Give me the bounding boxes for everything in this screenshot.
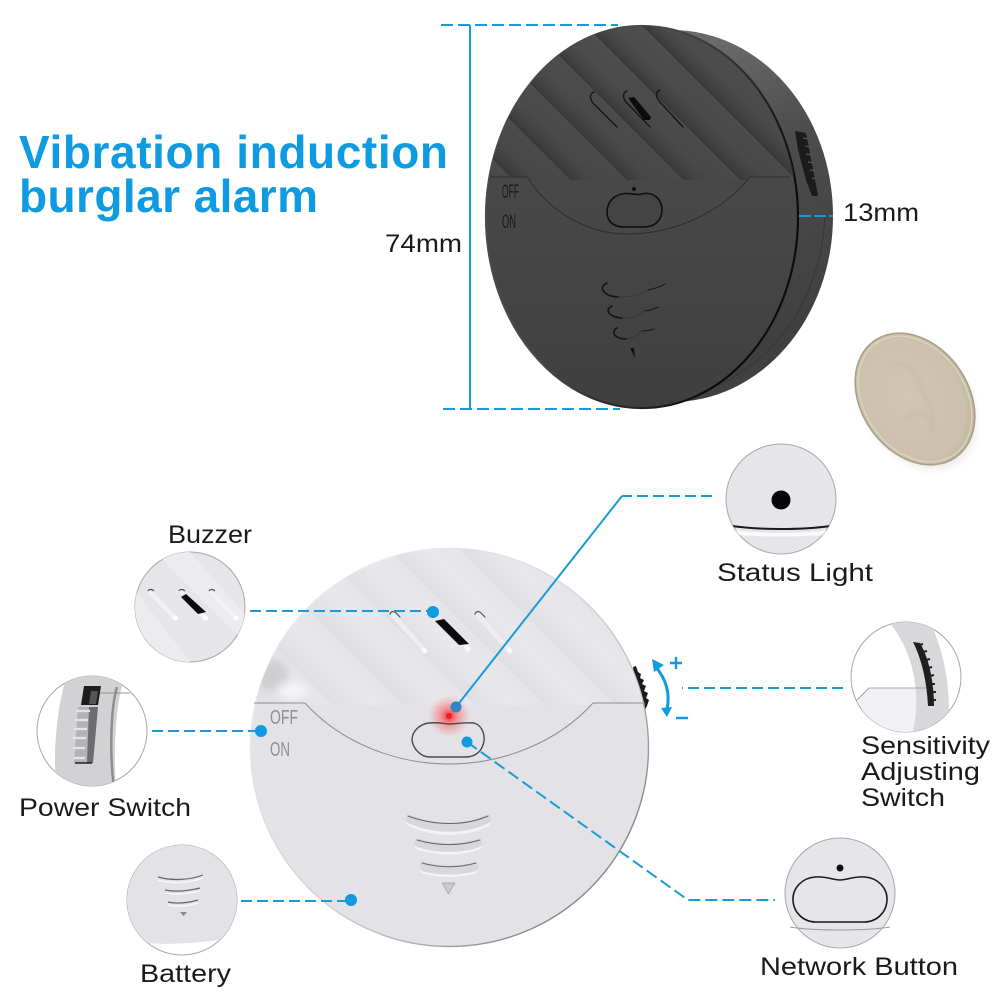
network button: [412, 723, 484, 757]
buzzer slots: [390, 612, 510, 651]
off on labels: [502, 182, 519, 233]
network button: [607, 193, 662, 227]
battery arrow: [442, 883, 455, 894]
sensitivity switch callout: Adjusting: [861, 758, 980, 786]
black alarm device: [480, 20, 833, 408]
sensitivity wheel teeth: [633, 666, 649, 712]
diagonal ribs: [260, 556, 644, 702]
thickness dimension 13mm: 13mm: [843, 199, 919, 227]
diagonal ribs: [480, 20, 800, 180]
thickness dimension 13mm: [799, 199, 919, 227]
black alarm device: OFF: [502, 182, 519, 203]
battery callout: Battery: [140, 960, 232, 988]
network button callout: Network Button: [760, 953, 958, 981]
off on labels: OFF: [270, 707, 298, 729]
battery grille: [408, 816, 488, 873]
height dimension 74mm: 74mm: [385, 230, 462, 258]
device side wall: [511, 30, 833, 402]
white alarm device: [240, 540, 660, 946]
off on labels: ON: [502, 212, 516, 233]
title: [19, 126, 448, 222]
off on labels: ON: [270, 739, 290, 761]
power switch callout: [19, 676, 267, 822]
title: burglar alarm: [19, 170, 318, 222]
title: Vibration induction: [19, 126, 448, 178]
device face: [250, 548, 648, 946]
battery grille: [603, 283, 665, 339]
status light callout: [450, 444, 873, 712]
coin: [830, 310, 1000, 492]
battery callout: [120, 840, 357, 988]
power switch callout: Power Switch: [19, 794, 191, 822]
sensitivity switch callout: Switch: [861, 784, 945, 812]
adjust arrow: [652, 657, 688, 718]
seam: [491, 177, 790, 234]
off on labels: [270, 707, 298, 761]
buzzer slots: [590, 90, 683, 127]
sensitivity switch callout: [652, 622, 991, 812]
network button callout: [462, 736, 958, 981]
buzzer callout: Buzzer: [168, 521, 252, 549]
device face: [486, 26, 798, 408]
height dimension 74mm: [385, 25, 620, 409]
sensitivity wheel: [795, 131, 818, 196]
status light glow: [428, 695, 470, 737]
sensitivity switch callout: Sensitivity: [861, 732, 991, 760]
seam: [254, 703, 645, 764]
status light callout: Status Light: [717, 559, 873, 587]
status dot: [632, 187, 636, 191]
buzzer callout: [135, 521, 439, 662]
